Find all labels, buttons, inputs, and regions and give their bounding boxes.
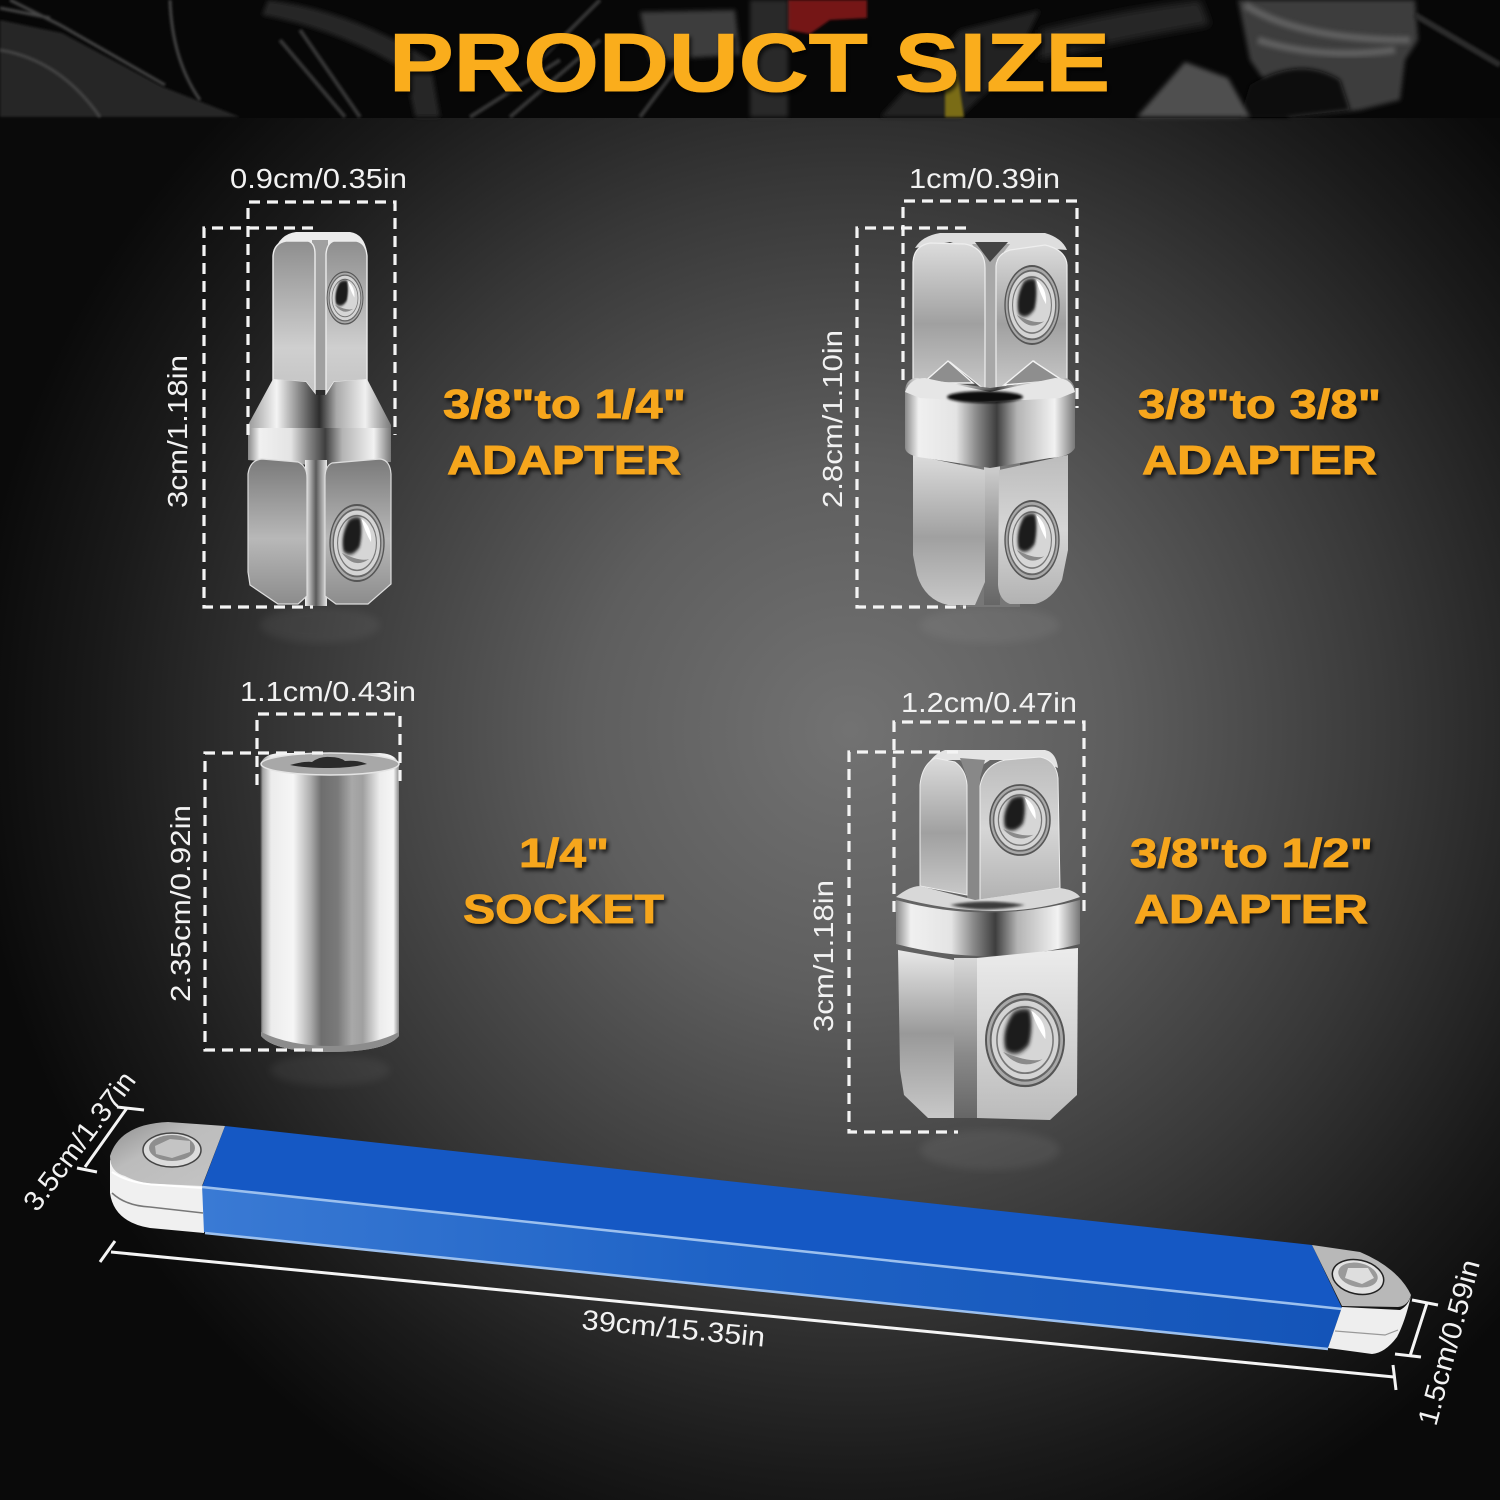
- reflection: [260, 607, 380, 643]
- drive left face: [273, 241, 315, 394]
- blue handle side face: [202, 1186, 1342, 1348]
- lower ridge: [984, 455, 1000, 605]
- pipes and wiring: [280, 0, 690, 117]
- dimension box: adapter 4 height: [849, 752, 958, 1132]
- bottom rim: [261, 1032, 399, 1052]
- product name: 3/8 to 1/2: [1130, 830, 1373, 932]
- block cap ridges: [1245, 5, 1410, 53]
- chrome piece: [750, 0, 788, 117]
- left head edge: [112, 1172, 202, 1188]
- handle highlight lines: [202, 1187, 1342, 1349]
- red cover: [788, 0, 867, 34]
- upper ridge: [960, 758, 985, 900]
- adapter 3/8 to 1/2: [896, 750, 1080, 1170]
- product name: 3/8 to 1/4: [443, 381, 686, 483]
- top left face: [913, 243, 985, 390]
- socket 1/4: [260, 753, 399, 1086]
- upper right face: [980, 757, 1060, 900]
- upper base shadow: [950, 902, 1025, 910]
- detent ball bottom: [330, 505, 384, 581]
- adapter 3/8 to 1/4: [248, 232, 391, 643]
- top right face: [996, 245, 1067, 388]
- dimension box: adapter 1 width: [248, 202, 395, 435]
- dimension: wrench length: 39cm/15.35in: [580, 1304, 767, 1353]
- cylinder body: [260, 753, 399, 1052]
- hose group: [880, 10, 1040, 117]
- collar rim: [905, 378, 1075, 402]
- dimension box: socket height: [205, 753, 323, 1050]
- adapter 3/8 to 3/8: [905, 233, 1075, 643]
- dimension box: adapter 2 height: [857, 228, 966, 607]
- top face: [261, 753, 399, 775]
- right head groove: [1335, 1330, 1398, 1335]
- yellow dipstick: [945, 70, 964, 117]
- detent ball top: [1005, 266, 1059, 344]
- drive ridge shadow: [975, 242, 1008, 262]
- panel creases: [0, 0, 200, 117]
- collar top: [896, 886, 1080, 911]
- product name: 1/4 socket: SOCKET: [463, 886, 664, 932]
- width label: adapter 1: 0.9cm/0.35in: [230, 163, 407, 194]
- engine part cluster: [640, 10, 740, 60]
- dimension: wrench length: [100, 1241, 1396, 1390]
- collar band: [905, 378, 1075, 468]
- top chamfer: [274, 232, 367, 252]
- product name: 3/8 to 1/2: 3/8"to 1/2": [1130, 830, 1373, 876]
- lower left face: [913, 455, 985, 605]
- upper left face: [920, 758, 967, 895]
- dimension: wrench thickness: 1.5cm/0.59in: [1412, 1256, 1486, 1429]
- product name: 3/8 to 1/4: ADAPTER: [447, 437, 681, 483]
- drive ridge: [972, 244, 1010, 390]
- reflection: [270, 1054, 390, 1086]
- dimension box: adapter 4 width: [894, 722, 1084, 912]
- shoulder triangle left: [923, 361, 973, 383]
- height label: adapter 2: 2.8cm/1.10in: [817, 330, 848, 508]
- width label: adapter 4: 1.2cm/0.47in: [901, 687, 1077, 718]
- body backing: [960, 440, 1020, 607]
- lower right face: [998, 455, 1068, 604]
- right hex bolt: [1329, 1255, 1387, 1299]
- dimension box: adapter 1 height: [204, 228, 313, 607]
- detent ball top: [990, 785, 1050, 855]
- product name: 3/8 to 3/8: 3/8"to 3/8": [1138, 381, 1381, 427]
- right head top: [1312, 1245, 1411, 1307]
- dark hose sheen: [1040, 0, 1210, 60]
- product name: 3/8 to 3/8: [1138, 381, 1381, 483]
- reflection: [920, 1130, 1060, 1170]
- width label: socket: 1.1cm/0.43in: [240, 676, 416, 707]
- height label: adapter 4: 3cm/1.18in: [808, 880, 839, 1032]
- lower ridge: [954, 958, 978, 1118]
- left hex bolt: [143, 1133, 201, 1167]
- left head top: [110, 1122, 225, 1186]
- detent ball bottom: [1005, 501, 1059, 579]
- hex opening: [290, 757, 367, 768]
- block shadow: [1240, 69, 1350, 117]
- top chamfer: [915, 233, 1067, 252]
- reflection: [920, 607, 1060, 643]
- product name: 1/4 socket: [463, 830, 664, 932]
- dimension box: socket width: [257, 714, 400, 785]
- collar: [248, 428, 391, 466]
- drive right face: [326, 241, 367, 394]
- engine block: [1238, 0, 1418, 117]
- blue handle upper face: [202, 1126, 1342, 1308]
- detent ball bottom: [986, 994, 1064, 1086]
- lower ridge: [305, 460, 327, 606]
- left head groove: [112, 1193, 203, 1213]
- product name: 3/8 to 1/4: 3/8"to 1/4": [443, 381, 686, 427]
- connector cluster: [1137, 62, 1250, 117]
- dark side panel: [0, 20, 240, 117]
- height label: adapter 1: 3cm/1.18in: [162, 355, 193, 508]
- collar band: [896, 900, 1080, 956]
- product name: 1/4 socket: 1/4": [519, 830, 609, 876]
- detent ball top: [327, 272, 363, 324]
- shoulder triangle right: [1004, 361, 1062, 385]
- top chamfer: [925, 750, 1058, 772]
- flared shoulder: [248, 379, 391, 430]
- extension wrench: [110, 1122, 1411, 1354]
- lower body right face: [325, 459, 391, 604]
- dimension: wrench head width: 3.5cm/1.37in: [17, 1065, 142, 1217]
- product name: 3/8 to 3/8: ADAPTER: [1142, 437, 1377, 483]
- lower left face: [898, 950, 954, 1118]
- dimension box: adapter 2 width: [903, 201, 1077, 408]
- right head side: [1328, 1296, 1411, 1354]
- drive ridge: [312, 240, 328, 390]
- product name: 3/8 to 1/2: ADAPTER: [1134, 886, 1368, 932]
- corner strut: [1415, 15, 1500, 65]
- left head side: [110, 1160, 204, 1233]
- height label: socket: 2.35cm/0.92in: [165, 805, 196, 1002]
- tube highlight: [262, 0, 440, 117]
- lower right face: [977, 948, 1078, 1120]
- title: PRODUCT SIZE: [389, 16, 1110, 109]
- lower body left face: [248, 459, 307, 604]
- collar rim shadow: [947, 391, 1023, 403]
- width label: adapter 2: 1cm/0.39in: [909, 163, 1060, 194]
- header band: engine bay photo: [0, 0, 1500, 118]
